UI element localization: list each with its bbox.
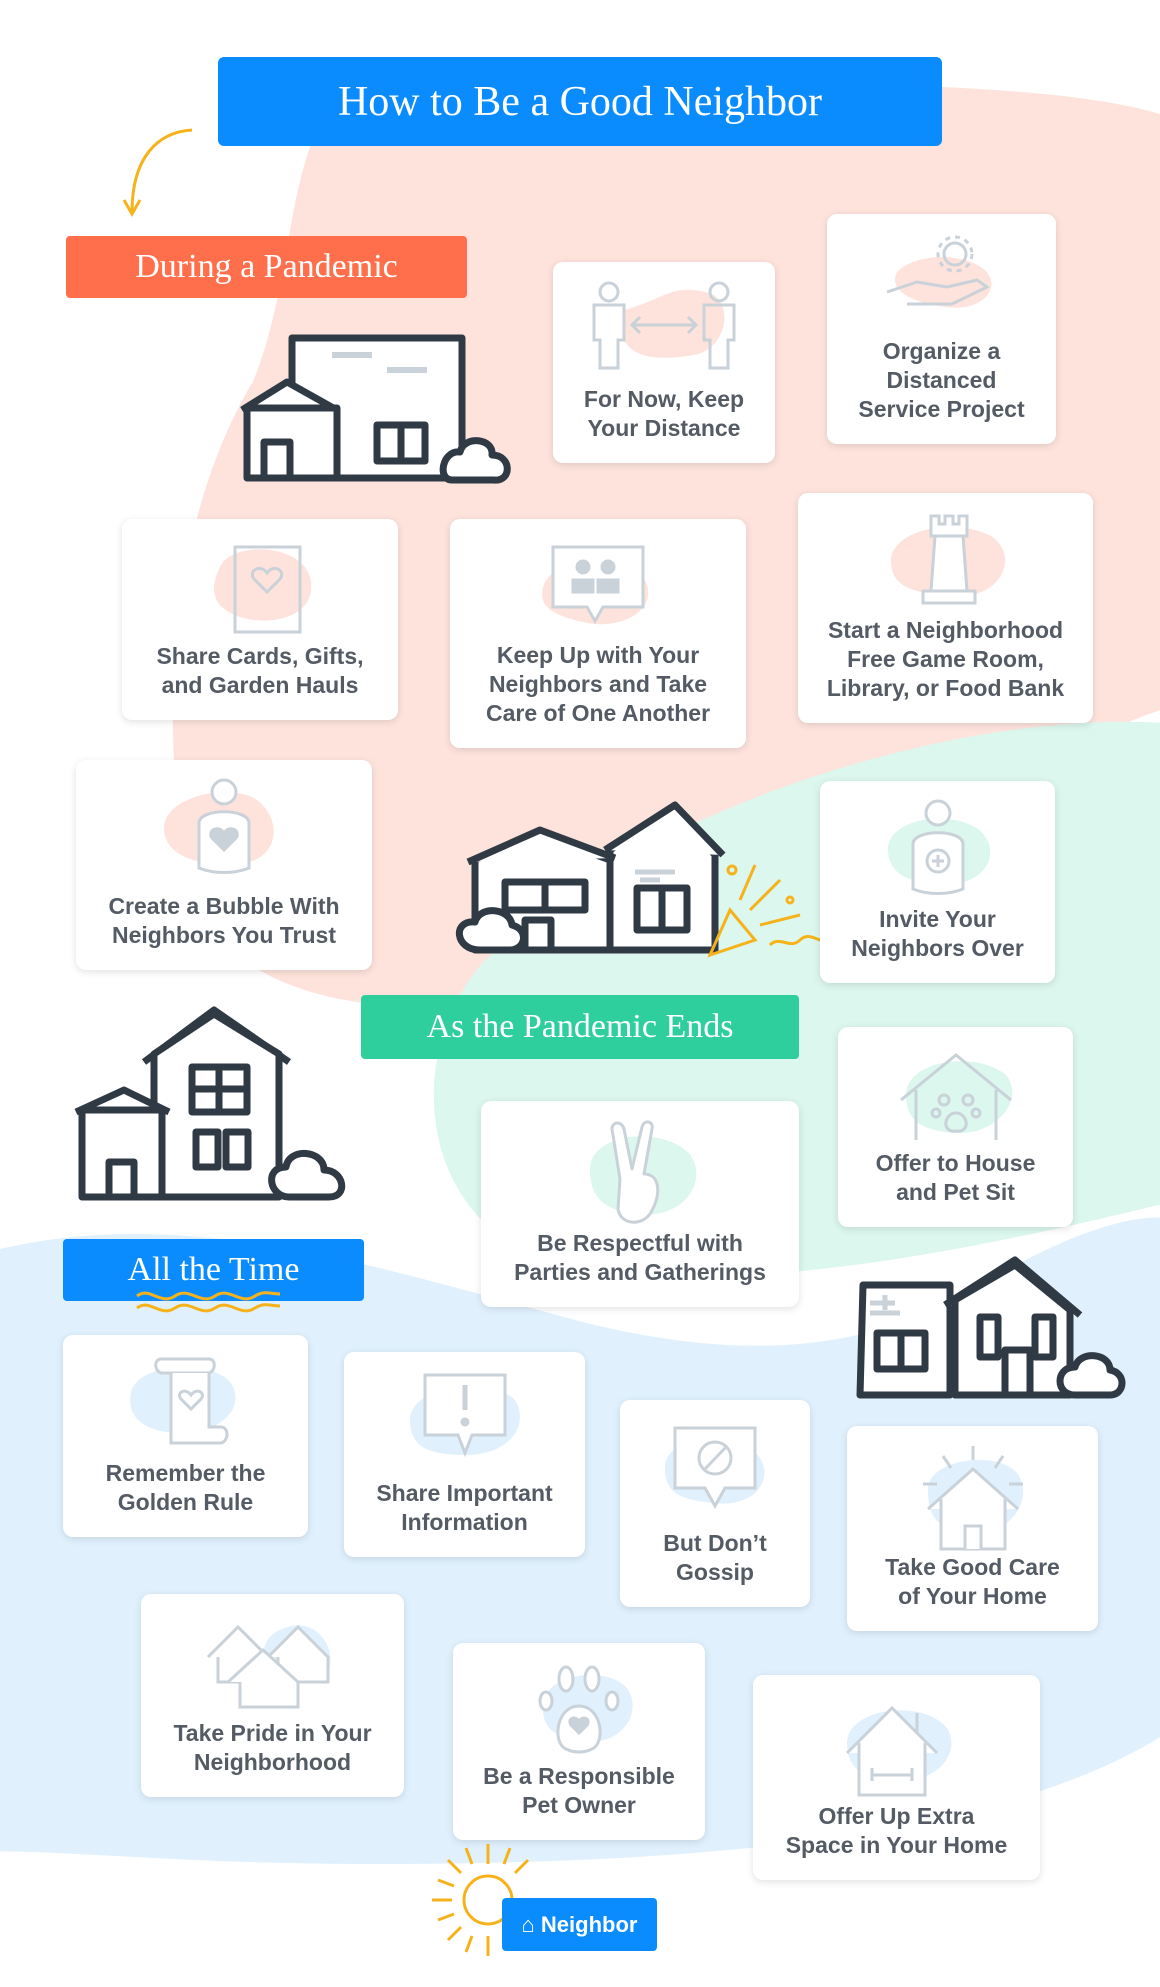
heading: All the Time — [63, 1239, 364, 1301]
heading: All the Time: All the Time — [128, 1251, 299, 1288]
card: Share Important Information — [344, 1352, 585, 1557]
card: Be Respectful with Parties and Gatherings: Parties and Gatherings — [514, 1259, 766, 1285]
card: Take Pride in Your Neighborhood: Neighborhood — [194, 1749, 351, 1775]
card: Take Good Care of Your Home: of Your Home — [898, 1583, 1047, 1609]
card: Create a Bubble — [76, 760, 372, 970]
arrow: curved yellow — [122, 128, 192, 217]
card: Share Important Information: Information — [401, 1509, 528, 1535]
heading: As the Pandemic Ends — [361, 995, 799, 1059]
card: Start a Neighborhood Free Game Room: Free Game Room, — [847, 646, 1044, 672]
card: Share Cards, Gifts, and Garden Hauls: and Garden Hauls — [162, 672, 358, 698]
card: Remember the Golden Rule: Golden Rule — [118, 1489, 253, 1515]
icon: shining house — [923, 1446, 1023, 1550]
icon: speech bubble people — [542, 546, 648, 624]
card: Remember the Golden Rule: Remember the — [106, 1460, 265, 1486]
card: Organize a Distanced Service Project: Service Project — [858, 396, 1025, 422]
house illustration 1 — [240, 334, 511, 484]
card: Be Respectful with Parties and Gatherings: Be Respectful with — [537, 1230, 743, 1256]
card: For Now, Keep Your Distance — [553, 262, 775, 463]
card: Start a Neighborhood Free Game Room: Library, or Food Bank — [827, 675, 1064, 701]
card: Share Cards, Gifts, and Garden Hauls: Share Cards, Gifts, — [156, 643, 364, 669]
card: Offer to House and Pet Sit: and Pet Sit — [896, 1179, 1015, 1205]
card: Keep Up with Your Neighbors: Care of One Another — [486, 700, 710, 726]
card: Offer to House and Pet Sit: Offer to House — [876, 1150, 1035, 1176]
icon: scroll — [130, 1358, 236, 1444]
icon: rook — [891, 514, 1005, 604]
card: Start a Neighborhood Free Game Room — [798, 493, 1093, 723]
card: Take Good Care of Your Home — [847, 1426, 1098, 1631]
card: But Don't Gossip: Gossip — [676, 1559, 754, 1585]
icon: sun — [432, 1844, 529, 1956]
card: But Don't Gossip — [620, 1400, 810, 1607]
card: Keep Up with Your Neighbors: Neighbors and Take — [489, 671, 707, 697]
house illustration 3 — [74, 1006, 346, 1200]
card: Organize a Distanced Service Project — [827, 214, 1056, 444]
card: Take Pride in Your Neighborhood — [141, 1594, 404, 1797]
icon: exclamation bubble — [410, 1374, 520, 1457]
card: Take Pride in Your Neighborhood: Take Pride in Your — [173, 1720, 372, 1746]
icon: house with paw — [900, 1053, 1012, 1140]
card: Be a Responsible Pet Owner: Be a Responsible — [483, 1763, 675, 1789]
card: Share Important Information: Share Important — [376, 1480, 553, 1506]
icon: hand with gear — [886, 236, 992, 308]
title — [218, 57, 942, 146]
card: Share Cards, Gifts, and Garden Hauls — [122, 519, 398, 720]
card: Offer Up Extra Space in Your Home — [753, 1675, 1040, 1880]
heading: As the Pandemic Ends: As the Pandemic Ends — [427, 1008, 733, 1045]
card: Keep Up with Your Neighbors: Keep Up with Your — [497, 642, 699, 668]
card: For Now, Keep Your Distance: For Now, Keep — [584, 386, 744, 412]
icon: card with heart — [214, 546, 312, 634]
card: Create a Bubble: Neighbors You Trust — [112, 922, 336, 948]
icon: distance — [592, 282, 736, 370]
icon: paw with heart — [538, 1666, 633, 1754]
logo: Neighbor: ⌂ Neighbor — [522, 1912, 637, 1936]
house illustration 2 with party popper — [456, 801, 820, 958]
logo: Neighbor — [502, 1898, 657, 1951]
card: Offer Up Extra Space in Your Home: Space in Your Home — [786, 1832, 1007, 1858]
squiggle — [136, 1291, 280, 1312]
title: How to Be a Good Neighbor — [338, 78, 822, 124]
icon: three houses — [207, 1625, 330, 1708]
icon: person with heart — [164, 778, 274, 874]
card: Invite Your Neighbors Over: Invite Your — [879, 906, 996, 932]
heading: During a Pandemic — [66, 236, 467, 298]
card: Remember the Golden Rule — [63, 1335, 308, 1537]
card: Organize a Distanced Service Project: Distanced — [887, 367, 996, 393]
icon: person with plus — [888, 800, 990, 895]
icon: house with bed — [846, 1706, 952, 1796]
icon: peace hand — [590, 1120, 696, 1224]
card: Offer to House and Pet Sit — [838, 1027, 1073, 1227]
card: Organize a Distanced Service Project: Organize a — [883, 338, 1000, 364]
card: Be a Responsible Pet Owner — [453, 1643, 705, 1840]
card: Create a Bubble: Create a Bubble With — [108, 893, 340, 919]
icon: no symbol bubble — [665, 1426, 764, 1509]
card: But Don't Gossip: But Don’t — [663, 1530, 767, 1556]
card: Invite Your Neighbors Over: Neighbors Over — [851, 935, 1024, 961]
card: Be Respectful with Parties and Gatherings — [481, 1101, 799, 1307]
card: Be a Responsible Pet Owner: Pet Owner — [522, 1792, 636, 1818]
card: Invite Your Neighbors Over — [820, 781, 1055, 983]
card: Offer Up Extra Space in Your Home: Offer Up Extra — [819, 1803, 974, 1829]
heading: During a Pandemic: During a Pandemic — [135, 248, 398, 285]
card: Take Good Care of Your Home: Take Good Care — [885, 1554, 1060, 1580]
house illustration 4 — [856, 1256, 1126, 1398]
card: For Now, Keep Your Distance: Your Distance — [588, 415, 740, 441]
card: Keep Up with Your Neighbors — [450, 519, 746, 748]
card: Start a Neighborhood Free Game Room: Start a Neighborhood — [828, 617, 1063, 643]
